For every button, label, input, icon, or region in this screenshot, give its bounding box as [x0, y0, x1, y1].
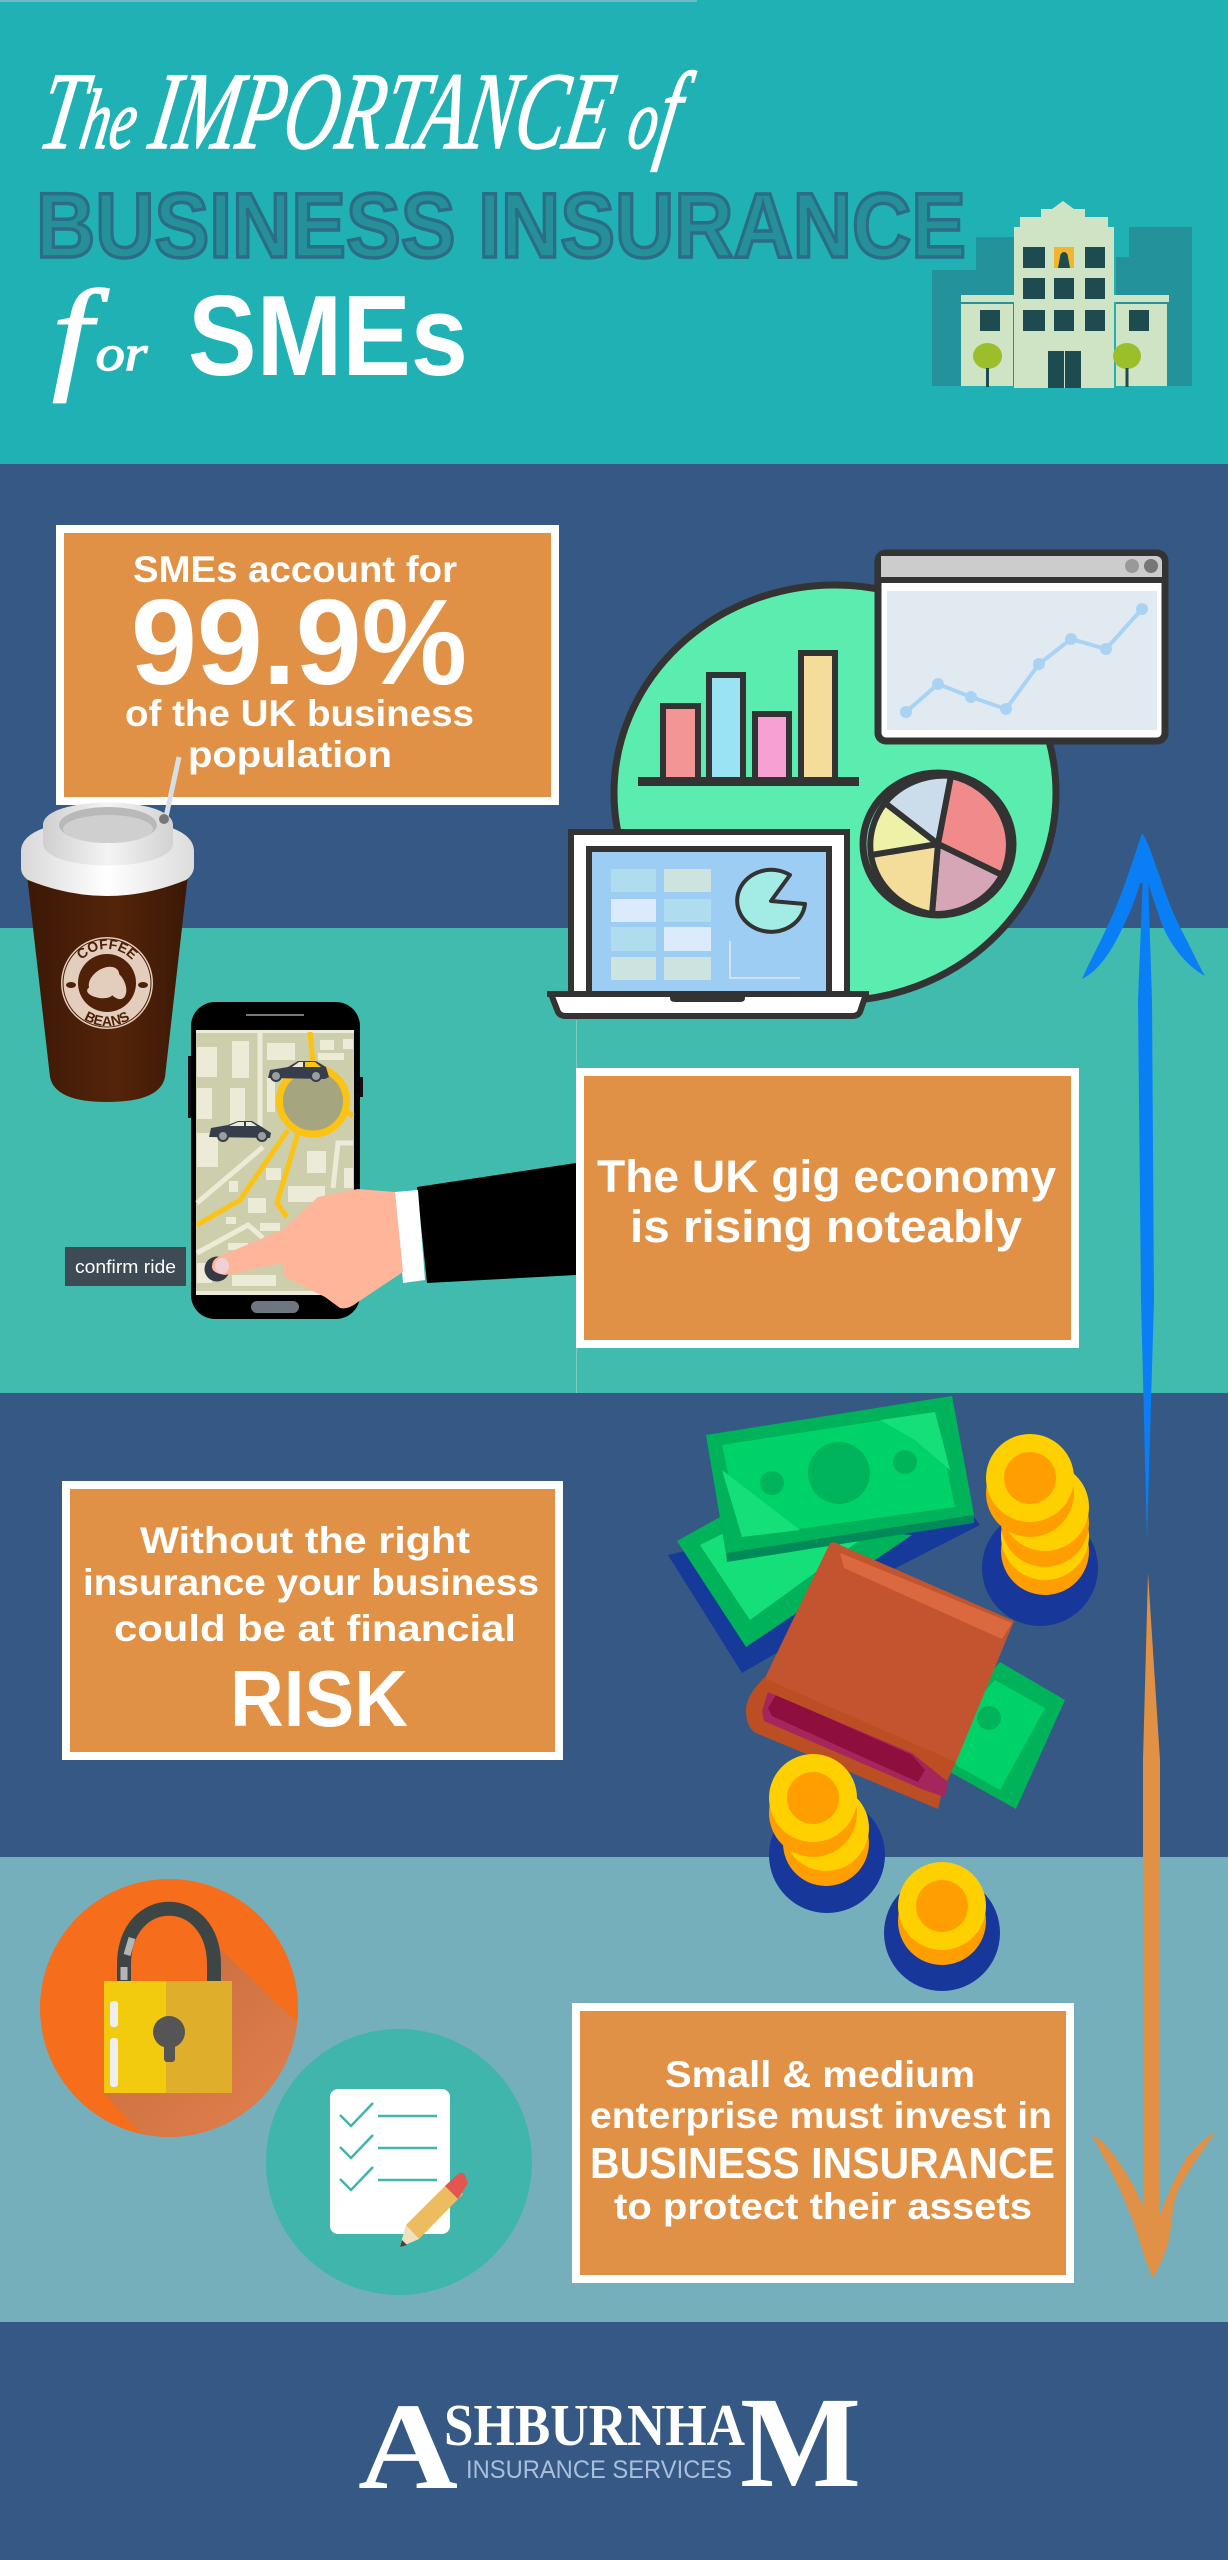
panel: invest in business insurance: BUSINESS INSURANCE: [590, 2139, 1055, 2188]
logo: Ashburnham Insurance Services: [358, 2371, 861, 2515]
laptop: [547, 832, 869, 1016]
band: navy section one: [0, 464, 1228, 929]
title: [32, 50, 966, 404]
label: confirm ride: confirm ride: [75, 1257, 176, 1277]
bar chart: [641, 653, 856, 783]
band: light blue section four: [0, 1857, 1228, 2322]
icon: checklist and pencil: [266, 2029, 532, 2295]
panel: SMEs account statistic: [60, 529, 555, 801]
band: header background: [0, 0, 1228, 465]
panel: gig economy: is rising noteably: [630, 1201, 1022, 1252]
label: confirm ride: [65, 1247, 186, 1286]
pie chart: [863, 773, 1013, 915]
title line: BUSINESS INSURANCE: BUSINESS INSURANCE: [36, 175, 966, 277]
panel: invest in business insurance: to protect their assets: [614, 2186, 1032, 2227]
title word: for: or: [96, 326, 148, 381]
icon: coin stack bottom: [884, 1862, 1000, 1991]
arrow: blue upward: [1082, 833, 1205, 1539]
panel: SMEs account statistic: population: [188, 734, 392, 775]
coffee beans badge: [61, 937, 153, 1029]
logo: Ashburnham Insurance Services: SHBURNHA: [444, 2392, 745, 2458]
panel: financial risk: insurance your business: [83, 1562, 539, 1603]
title word: SMEs: SMEs: [188, 273, 468, 400]
icon: padlock: [40, 1879, 298, 2138]
browser line chart: [878, 553, 1165, 741]
title word: for: f: [52, 265, 92, 404]
panel: financial risk: RISK: [230, 1654, 408, 1743]
logo: Ashburnham Insurance Services: M: [740, 2371, 861, 2515]
panel: gig economy: The UK gig economy: [597, 1151, 1056, 1202]
panel: financial risk: could be at financial: [114, 1608, 516, 1649]
panel: invest in business insurance: Small & medium: [665, 2054, 975, 2095]
car two: [209, 1121, 271, 1141]
car one: [268, 1061, 329, 1081]
icon: coin stack middle: [769, 1754, 885, 1913]
title line: The IMPORTANCE of: The IMPORTANCE of: [32, 50, 701, 172]
band: teal section two: [0, 928, 1228, 1394]
panel: SMEs account statistic: SMEs account for: [133, 549, 457, 590]
panel: financial risk: [66, 1485, 559, 1756]
panel: financial risk: Without the right: [140, 1520, 470, 1561]
logo: Ashburnham Insurance Services: A: [358, 2378, 458, 2515]
icon: money and wallet: [668, 1396, 1065, 1809]
icon: dashboard charts blob: [547, 553, 1165, 1016]
icon: smartphone with map: [188, 1002, 363, 1319]
logo: Ashburnham Insurance Services: INSURANCE SERVICES: [466, 2456, 732, 2484]
panel: invest in business insurance: enterprise must invest in: [590, 2095, 1052, 2136]
coffee beans badge: COFFEE: [78, 940, 138, 960]
icon: coffee cup: [21, 756, 194, 1102]
panel: invest in business insurance: [576, 2007, 1070, 2279]
panel: gig economy: [580, 1072, 1075, 1344]
icon: hand in suit pressing button: [204, 1163, 576, 1308]
coffee beans badge: BEANS: [84, 1011, 129, 1026]
panel: SMEs account statistic: of the UK business: [125, 693, 474, 734]
panel: SMEs account statistic: 99.9%: [131, 574, 467, 710]
icon: coin stack top right: [982, 1434, 1098, 1626]
icon: office building: [932, 201, 1192, 388]
arrow: orange downward: [1092, 1573, 1215, 2278]
band: navy section three: [0, 1393, 1228, 1857]
band: navy footer: [0, 2322, 1228, 2560]
